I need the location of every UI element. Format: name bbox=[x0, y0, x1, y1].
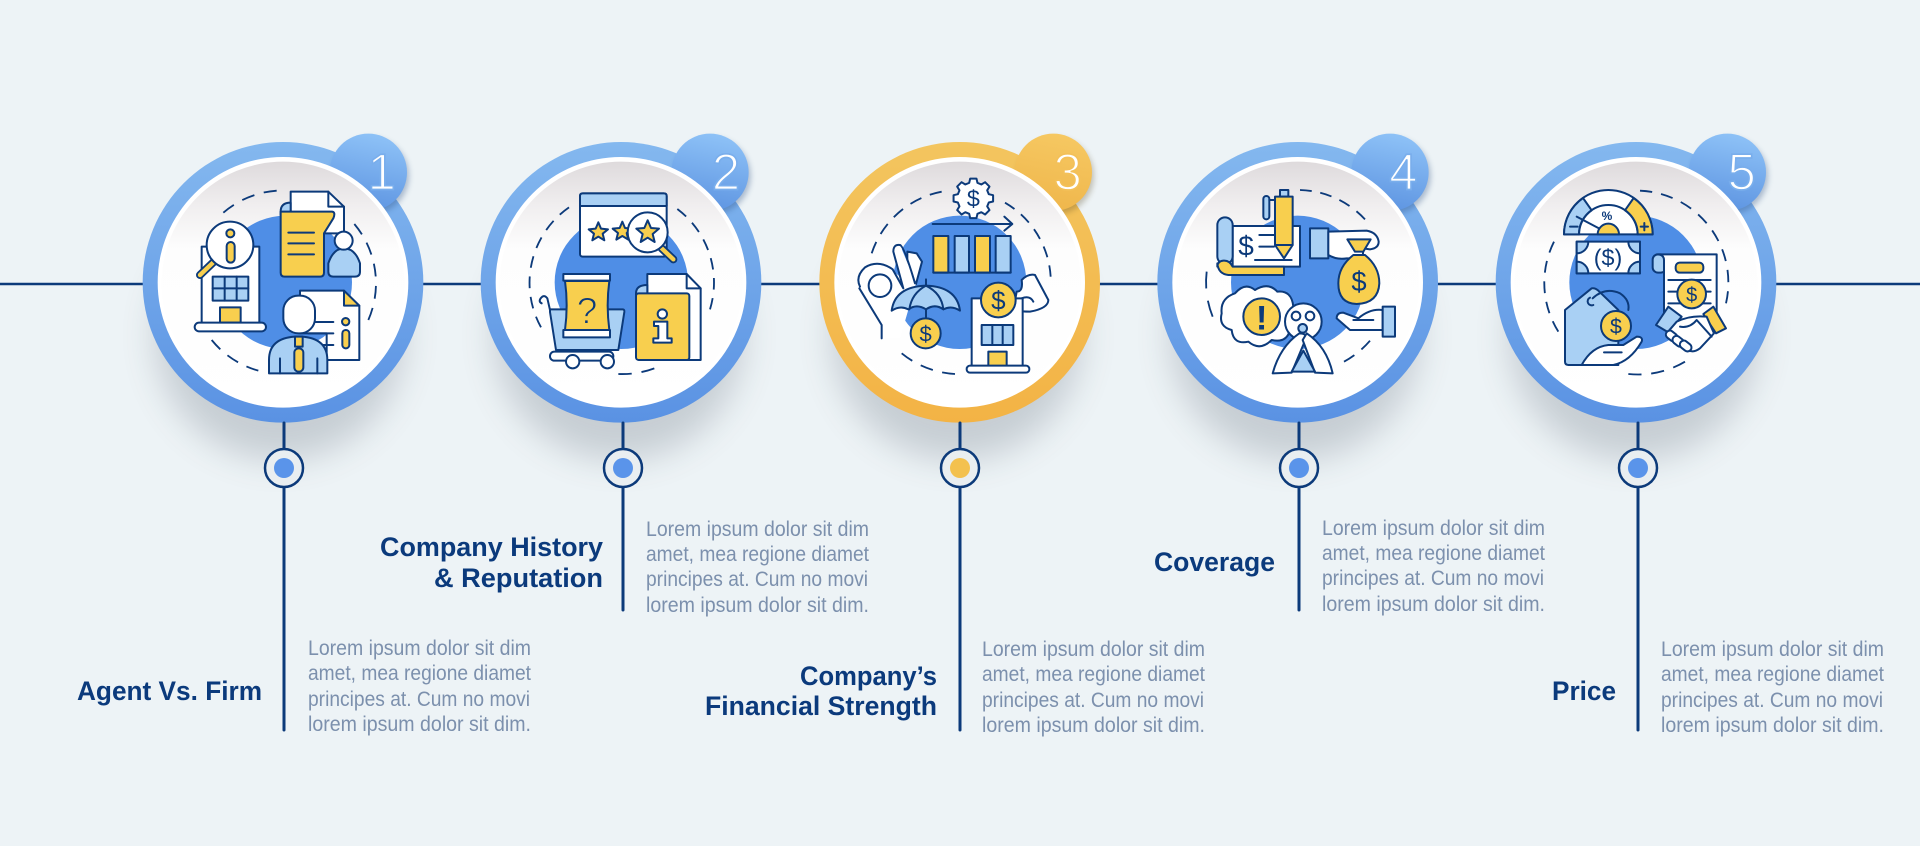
ring bbox=[1157, 142, 1438, 423]
shadows under circles bbox=[155, 210, 1759, 460]
text block step 3 bbox=[982, 638, 1205, 737]
heading: company history and reputation: Company History bbox=[380, 532, 603, 562]
blue backdrop bbox=[1231, 216, 1364, 349]
text block step 5: Lorem ipsum dolor sit dim bbox=[1661, 638, 1884, 661]
ring bbox=[819, 142, 1100, 423]
dashed orbit bbox=[1544, 191, 1728, 375]
icon: ok hand bbox=[858, 245, 922, 338]
icon: percent gauge: % bbox=[1602, 209, 1613, 223]
text block step 2: Lorem ipsum dolor sit dim bbox=[646, 518, 869, 541]
blue backdrop bbox=[219, 216, 352, 349]
icon: building with magnifier bbox=[195, 222, 266, 331]
icon: rating browser window bbox=[580, 193, 673, 259]
text block step 1: Lorem ipsum dolor sit dim bbox=[308, 637, 531, 660]
icon: handshake bbox=[1656, 307, 1726, 353]
icon: strong building with coin: $ bbox=[991, 285, 1006, 315]
inner disc bbox=[834, 157, 1085, 408]
number badge 5: 5 bbox=[1728, 144, 1756, 201]
icon: agent person bbox=[269, 296, 327, 373]
text block step 4: amet, mea regione diamet bbox=[1322, 542, 1545, 565]
icon: dollar gear bbox=[954, 179, 993, 218]
heading: company's financial strength: Company’s bbox=[800, 661, 937, 691]
text block step 3: amet, mea regione diamet bbox=[982, 663, 1205, 686]
number badge 1 bbox=[330, 134, 409, 214]
icon: dollar gear: $ bbox=[967, 186, 980, 212]
connector step 3 bbox=[941, 423, 979, 730]
inner disc bbox=[496, 157, 746, 408]
icon: info folder bbox=[636, 274, 701, 360]
text block step 4 bbox=[1322, 517, 1545, 616]
heading: company's financial strength: Financial Strength bbox=[705, 691, 937, 721]
heading: agent vs firm: Agent Vs. Firm bbox=[77, 676, 262, 706]
text block step 2 bbox=[646, 518, 869, 617]
icon: small person bbox=[328, 232, 360, 277]
icon: cheque scroll with pen: $ bbox=[1238, 231, 1254, 262]
dashed orbit bbox=[872, 192, 1051, 374]
blue backdrop bbox=[555, 216, 688, 349]
icon: umbrella with coin: $ bbox=[920, 321, 932, 346]
icon: price tag on hand bbox=[1565, 288, 1642, 365]
text block step 4: Lorem ipsum dolor sit dim bbox=[1322, 517, 1545, 540]
icon: bar chart with arrow bbox=[933, 217, 1012, 273]
panel: step 4 coverage circle bbox=[1157, 134, 1438, 423]
text block step 1: principes at. Cum no movi bbox=[308, 688, 530, 711]
icon: percent gauge bbox=[1564, 190, 1653, 234]
text block step 2: principes at. Cum no movi bbox=[646, 568, 868, 591]
text block step 5: lorem ipsum dolor sit dim. bbox=[1661, 714, 1884, 737]
timeline horizontal line bbox=[0, 283, 1920, 285]
panel: step 5 price circle bbox=[1496, 134, 1776, 423]
heading: company history and reputation bbox=[380, 532, 603, 593]
icon: price tag on hand: $ bbox=[1610, 315, 1622, 339]
number badge 3 bbox=[1015, 134, 1094, 214]
text block step 4: principes at. Cum no movi bbox=[1322, 567, 1544, 590]
number badge 4 bbox=[1351, 134, 1431, 214]
icon: contract document bbox=[1653, 254, 1717, 323]
icon: shopping cart with question bbox=[540, 274, 624, 368]
icon: hand with money bag: $ bbox=[1351, 266, 1367, 297]
connector step 1 bbox=[265, 423, 303, 730]
icon: alert thought cloud bbox=[1221, 286, 1296, 346]
connector step 4 bbox=[1280, 423, 1318, 610]
icon: receiving hand bbox=[1337, 307, 1395, 337]
dashed orbit bbox=[530, 207, 714, 374]
text block step 3: Lorem ipsum dolor sit dim bbox=[982, 638, 1205, 661]
icon: folder with document bbox=[281, 192, 344, 277]
icon: banknote: ($) bbox=[1594, 244, 1622, 270]
text block step 1: amet, mea regione diamet bbox=[308, 662, 531, 685]
text block step 2: amet, mea regione diamet bbox=[646, 543, 869, 566]
dashed orbit bbox=[1206, 190, 1370, 362]
icon: banknote bbox=[1577, 242, 1640, 273]
panel: step 1 agent vs firm circle bbox=[143, 134, 423, 423]
number badge 2: 2 bbox=[712, 143, 740, 200]
ring bbox=[481, 142, 761, 423]
blue backdrop bbox=[893, 216, 1026, 349]
text block step 3: lorem ipsum dolor sit dim. bbox=[982, 714, 1205, 737]
text block step 1: lorem ipsum dolor sit dim. bbox=[308, 713, 531, 736]
number badge 4: 4 bbox=[1389, 144, 1417, 201]
icon: strong building with coin bbox=[967, 275, 1048, 373]
icon: umbrella with coin bbox=[892, 279, 960, 348]
icon: shopping cart with question: ? bbox=[577, 289, 597, 331]
icon: worried person bbox=[1273, 303, 1333, 373]
dashed orbit bbox=[212, 191, 376, 371]
number badge 5 bbox=[1689, 134, 1768, 214]
text block step 4: lorem ipsum dolor sit dim. bbox=[1322, 593, 1545, 616]
inner disc bbox=[1172, 157, 1423, 408]
connector step 5 bbox=[1619, 423, 1657, 730]
inner disc bbox=[1511, 157, 1761, 408]
blue backdrop bbox=[1569, 216, 1703, 349]
heading: company history and reputation: & Reputation bbox=[434, 563, 603, 593]
connector step 2 bbox=[604, 423, 642, 610]
icon: cheque scroll with pen bbox=[1217, 190, 1300, 275]
panel: step 3 financial strength circle bbox=[819, 134, 1100, 423]
heading: coverage: Coverage bbox=[1154, 547, 1275, 577]
text block step 2: lorem ipsum dolor sit dim. bbox=[646, 594, 869, 617]
icon: profile document bbox=[300, 291, 359, 360]
heading: price: Price bbox=[1552, 676, 1616, 706]
number badge 2 bbox=[671, 134, 751, 214]
inner disc bbox=[158, 157, 408, 408]
text block step 1 bbox=[308, 637, 531, 736]
icon: contract document: $ bbox=[1686, 284, 1697, 306]
text block step 5 bbox=[1661, 638, 1884, 737]
text block step 5: amet, mea regione diamet bbox=[1661, 663, 1884, 686]
text block step 5: principes at. Cum no movi bbox=[1661, 689, 1883, 712]
ring bbox=[1496, 142, 1776, 423]
panel: step 2 company history circle bbox=[481, 134, 761, 423]
icon: alert thought cloud: ! bbox=[1256, 299, 1267, 337]
number badge 1: 1 bbox=[368, 143, 396, 200]
icon: hand with money bag bbox=[1310, 228, 1379, 304]
number badge 3: 3 bbox=[1054, 144, 1082, 201]
text block step 3: principes at. Cum no movi bbox=[982, 689, 1204, 712]
ring bbox=[143, 142, 423, 423]
heading: company's financial strength bbox=[705, 661, 937, 721]
